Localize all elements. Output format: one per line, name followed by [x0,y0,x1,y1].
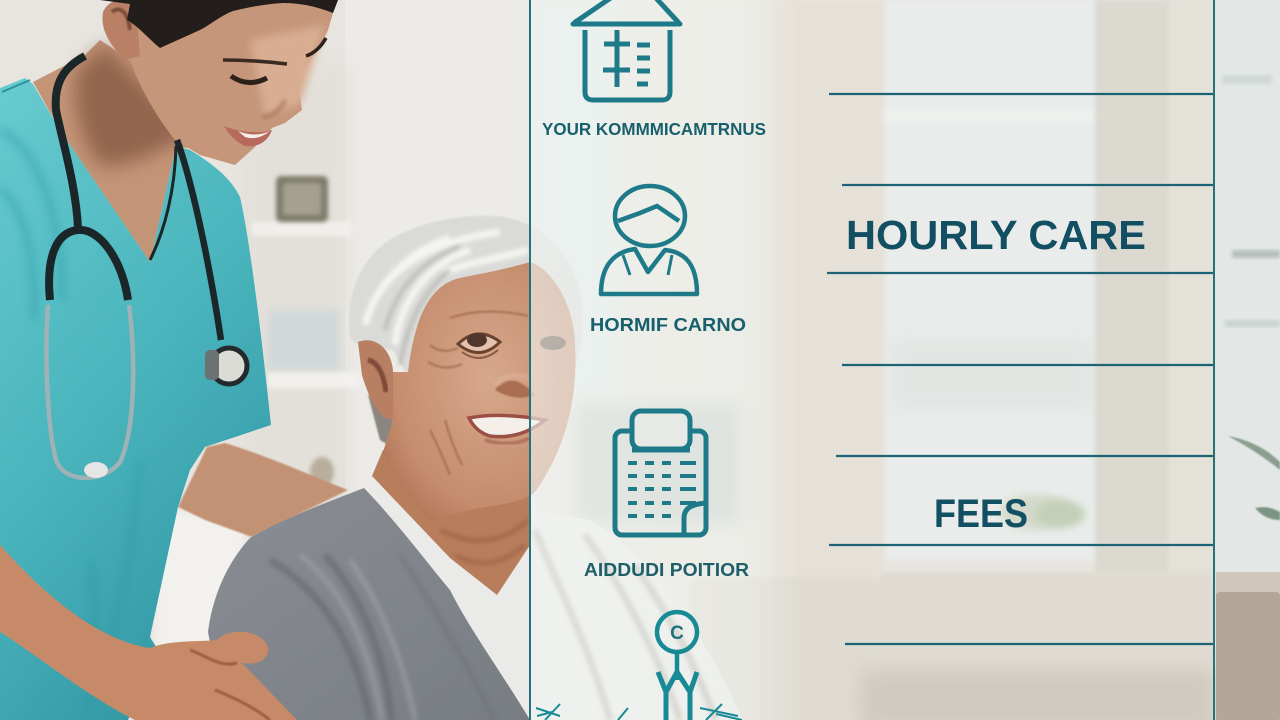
ear [358,340,393,420]
chest piece [211,348,247,384]
hair strands [365,232,528,345]
nurse smile [224,126,272,146]
shelves [155,60,360,660]
nurse [0,0,338,720]
head [120,0,338,165]
label: carer: HORMIF CARNO [590,314,746,335]
neck and chest [33,40,200,262]
hair [95,0,338,48]
nurse back arm [178,443,348,537]
scrubs [0,78,271,720]
collar trim [150,146,176,260]
panel borders [530,0,1214,720]
cardigan folds [270,555,392,720]
face [383,262,575,520]
icon: carer person [601,186,697,294]
heading: fees: FEES [934,492,1028,536]
nape hair [368,395,393,448]
nose [495,380,535,398]
stethoscope tubes [56,56,85,228]
nose shadow [262,100,285,118]
hair [349,216,583,380]
icon: coin and hand: C [670,623,684,644]
label: additional: AIDDUDI POITIOR [584,559,749,580]
eye right [540,336,566,350]
scarf folds [535,530,715,720]
icon: calendar [615,411,706,535]
row divider lines [827,94,1213,644]
icon: coin and hand [536,612,742,720]
forearm and hand [0,545,297,720]
scrub folds [0,130,140,720]
brow and eyes [223,60,287,64]
sofa and plants [690,436,1280,720]
cardigan [208,488,530,720]
elder woman [208,216,742,720]
heading: hourly care: HOURLY CARE [846,212,1146,258]
glass overlay panel [530,0,800,720]
label: your home care: YOUR KOMMMICAMTRNUS [542,119,766,139]
smile [469,415,545,437]
neck [372,450,530,595]
neck shadow [75,45,190,166]
face highlight [250,25,325,115]
shirt and scarf [366,472,742,720]
eye left [458,334,500,353]
wrinkles [428,311,528,475]
icon: house with checklist [573,0,680,100]
ear [102,0,140,60]
